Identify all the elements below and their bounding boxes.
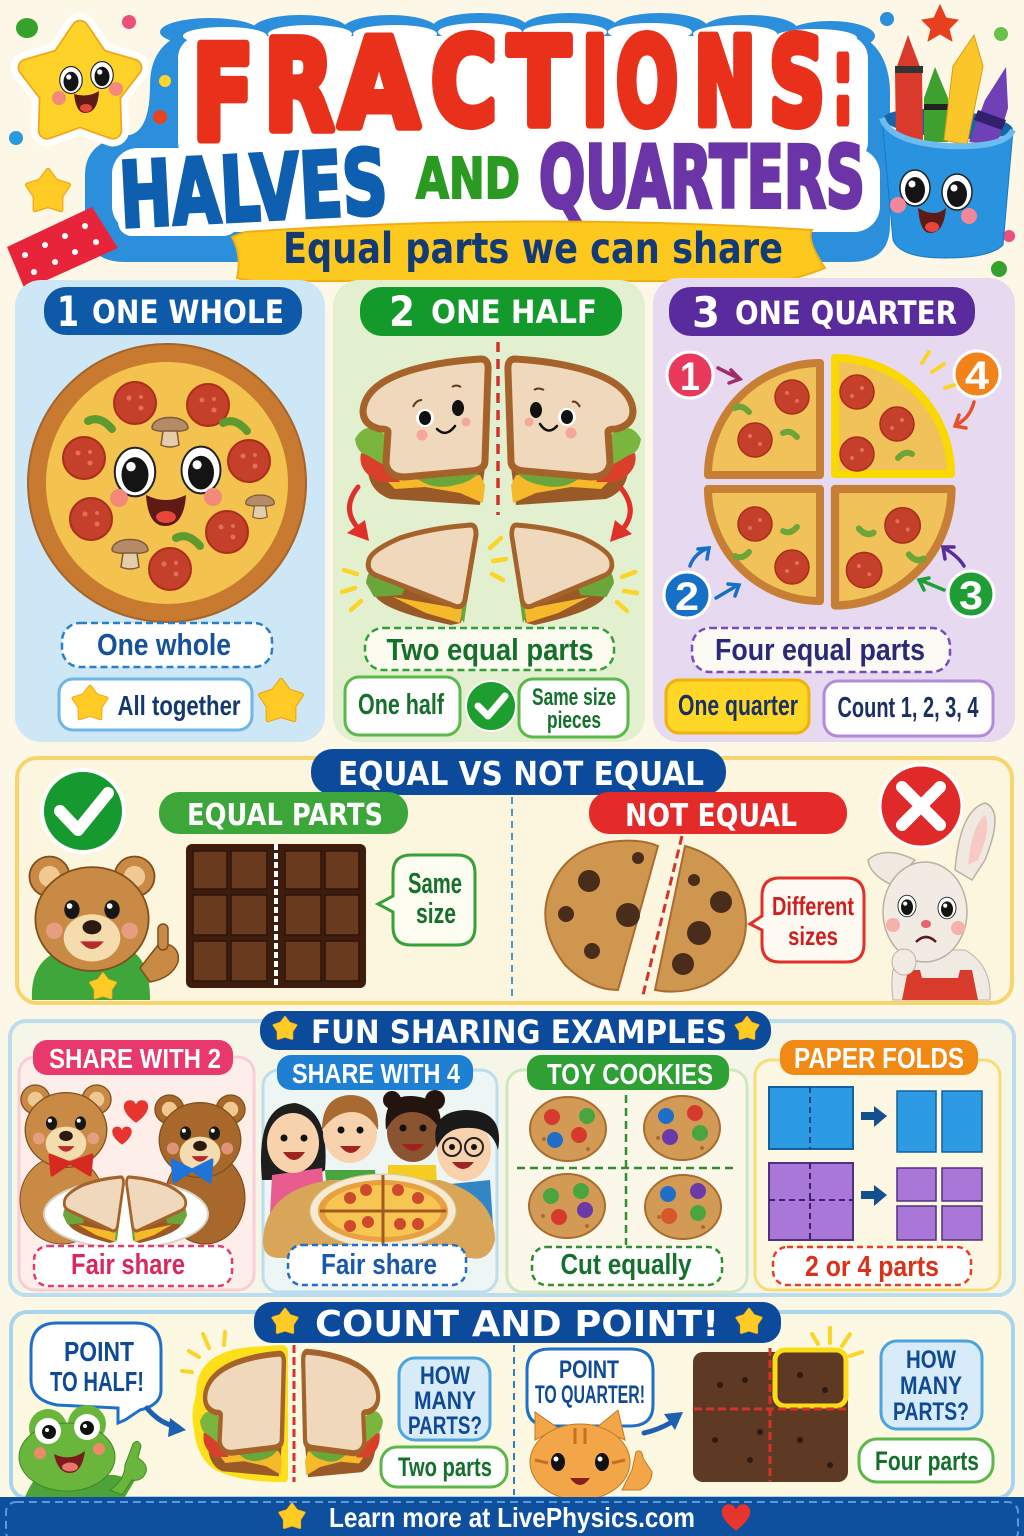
label: four parts: [859, 1439, 993, 1482]
bears sharing: [20, 1085, 245, 1248]
label: [532, 1247, 722, 1285]
shine marks: [342, 538, 637, 611]
quartered pizza: [708, 358, 951, 605]
heading: SHARE WITH 2: [49, 1043, 221, 1074]
icon: crayon cup: [882, 35, 1014, 258]
cup body: [882, 118, 1013, 258]
speech bubble: point to half: POINT: [64, 1336, 134, 1367]
face left: [413, 386, 470, 440]
shine marks: [922, 352, 954, 388]
title: fractions: I: [582, 14, 608, 153]
label: one quarter: [666, 680, 809, 733]
heading: EQUAL VS NOT EQUAL: [338, 754, 704, 793]
label: two parts: [381, 1447, 507, 1487]
number badges: 3: [959, 574, 983, 618]
footer: [0, 1497, 1024, 1536]
panel: one half: [333, 280, 645, 742]
callout: how many parts: MANY: [414, 1387, 476, 1415]
callout: how many parts: [399, 1358, 490, 1440]
number badges: [664, 351, 1000, 619]
icon: star: [260, 680, 302, 720]
title: halves: HALVES: [117, 130, 390, 249]
callout: different sizes: Different: [772, 891, 854, 921]
decorative confetti dots: [9, 5, 1015, 277]
callout: how many parts: [881, 1341, 982, 1429]
heading: TOY COOKIES: [547, 1059, 713, 1091]
heading: one quarter: [669, 287, 975, 337]
green crayon: [924, 67, 948, 142]
bear with thumbs up: [29, 856, 178, 1000]
label: four equal parts: Four equal parts: [715, 632, 925, 667]
white title blob: [112, 23, 880, 236]
child 4: [435, 1110, 499, 1225]
pizza with face: [28, 344, 306, 622]
sandwich: point to half: [192, 1345, 383, 1482]
title: fractions: A: [339, 13, 419, 155]
label: one whole: One whole: [97, 627, 231, 662]
card: share with 4: [261, 1055, 499, 1292]
label: same size pieces: pieces: [547, 707, 601, 734]
card: paper folds: [755, 1040, 1000, 1290]
brownie in quarters: [693, 1348, 848, 1482]
label: one half: One half: [358, 689, 444, 721]
callout: how many parts: MANY: [900, 1372, 962, 1400]
label: one whole: [62, 623, 272, 667]
callout: different sizes: sizes: [788, 921, 838, 951]
section: equal vs not equal: [17, 749, 1012, 1003]
label: count: [824, 681, 993, 736]
cookie top left: [530, 1097, 606, 1161]
yellow crayon: [944, 35, 983, 145]
heading: one half: 2: [389, 287, 415, 336]
subtitle ribbon: [232, 221, 825, 281]
callout: how many parts: PARTS?: [893, 1398, 969, 1426]
speech bubble: point to quarter: [527, 1349, 653, 1436]
callout: how many parts: HOW: [906, 1346, 956, 1374]
count arrows: [690, 368, 974, 598]
number badges: 2: [675, 575, 699, 619]
title: fractions: O: [616, 14, 678, 153]
speech bubble: point to half: [31, 1323, 161, 1423]
card: share with 2: [19, 1040, 254, 1290]
speech bubble: point to quarter: TO QUARTER!: [535, 1381, 645, 1409]
child 1: [261, 1103, 326, 1215]
header banner: [85, 12, 890, 281]
heading: not equal: [589, 792, 847, 834]
callout: same size: [378, 855, 475, 945]
heading: not equal: NOT EQUAL: [625, 798, 797, 834]
label: [288, 1245, 466, 1285]
heading: one half: [360, 287, 622, 336]
label: same size pieces: [519, 679, 628, 737]
callout: different sizes: [750, 878, 864, 962]
cookie bottom right: [645, 1175, 721, 1239]
icon: check: [466, 681, 516, 731]
blue cloud: [85, 13, 890, 262]
heading: one quarter: 3: [692, 288, 720, 337]
panel: one whole: [15, 280, 325, 742]
icon: cross: [880, 765, 962, 847]
children: [261, 1090, 499, 1225]
label: one half: [345, 677, 460, 735]
section: fun sharing examples: [10, 1011, 1014, 1295]
polka dot tape: [7, 207, 118, 290]
arrow: [644, 1412, 683, 1433]
label: Cut equally: [560, 1249, 692, 1281]
red crayon: [895, 35, 923, 140]
heading: COUNT AND POINT!: [315, 1304, 719, 1345]
purple fold: [769, 1163, 982, 1240]
face right: [524, 388, 580, 438]
title: fractions: C: [431, 14, 497, 153]
shine marks: [812, 1328, 862, 1356]
icon: check: [42, 770, 124, 852]
heading: SHARE WITH 4: [292, 1058, 460, 1089]
heading: one quarter: ONE QUARTER: [735, 294, 957, 332]
sandwich cut in half: [355, 342, 641, 515]
arrow left: [347, 487, 369, 541]
number badges: 1: [680, 355, 700, 399]
chocolate bar: [186, 844, 366, 988]
title: fractions: [192, 12, 853, 170]
subtitle ribbon: Equal parts we can share: [283, 224, 783, 274]
label: four parts: Four parts: [875, 1446, 979, 1476]
speech bubble: point to half: TO HALF!: [50, 1366, 144, 1397]
arrow: [147, 1408, 186, 1437]
section: count and point: [11, 1302, 1013, 1500]
bunny: [868, 803, 995, 1000]
title: and: AND: [416, 147, 520, 212]
child 3: [383, 1090, 445, 1205]
callout: how many parts: HOW: [420, 1362, 470, 1390]
label: one quarter: One quarter: [678, 690, 798, 722]
heading: equal parts: EQUAL PARTS: [187, 798, 383, 833]
dashed cut lines: [517, 1095, 738, 1245]
cookie cut unevenly: [545, 836, 746, 995]
label: Fair share: [321, 1249, 437, 1281]
cat: [530, 1410, 652, 1500]
heading: one whole: [44, 287, 302, 336]
title: fractions: S: [769, 14, 825, 153]
icon: heart: [722, 1504, 750, 1531]
icon: star: [280, 1504, 304, 1528]
title: fractions: R: [264, 15, 334, 159]
purple crayon: [969, 67, 1008, 145]
label: 2 or 4 parts: [805, 1251, 939, 1283]
frog: [19, 1405, 146, 1497]
label: [34, 1246, 232, 1286]
title: fractions: N: [694, 14, 756, 153]
label: all together: [59, 679, 252, 730]
label: two parts: Two parts: [398, 1452, 492, 1482]
sandwich triangle left: [366, 525, 476, 625]
title: fractions: T: [508, 14, 570, 153]
heading: one half: ONE HALF: [431, 293, 597, 331]
hearts: [112, 1100, 148, 1145]
label: Fair share: [71, 1249, 185, 1281]
label: [773, 1247, 971, 1285]
label: same size pieces: Same size: [532, 684, 616, 711]
cookie bottom left: [529, 1174, 605, 1238]
heading: FUN SHARING EXAMPLES: [311, 1013, 727, 1051]
label: two equal parts: Two equal parts: [386, 632, 594, 667]
header banner: :: [833, 12, 853, 151]
callout: same size: Same: [408, 868, 462, 900]
shine marks: [182, 1332, 225, 1372]
icon: small star: [27, 170, 69, 210]
footer text: Learn more at LivePhysics.com: [329, 1502, 695, 1533]
panel: one quarter: [653, 278, 1015, 742]
title: fractions: F: [192, 18, 254, 170]
heading: PAPER FOLDS: [794, 1043, 964, 1075]
heading: one whole: ONE WHOLE: [92, 293, 284, 331]
callout: how many parts: PARTS?: [408, 1412, 482, 1440]
blue fold: [769, 1087, 982, 1152]
icon: smiling star: [27, 29, 133, 130]
heading: one whole: 1: [57, 287, 79, 336]
child 2: [322, 1095, 378, 1205]
label: all together: All together: [118, 690, 241, 721]
table with pizza: [263, 1174, 495, 1259]
number badges: 4: [965, 354, 990, 398]
arrow right: [610, 488, 632, 542]
sandwich triangle right: [512, 525, 614, 625]
speech bubble: point to quarter: POINT: [559, 1356, 619, 1384]
cookie top right: [644, 1096, 720, 1160]
callout: same size: size: [416, 898, 456, 930]
card: toy cookies: [507, 1055, 747, 1292]
